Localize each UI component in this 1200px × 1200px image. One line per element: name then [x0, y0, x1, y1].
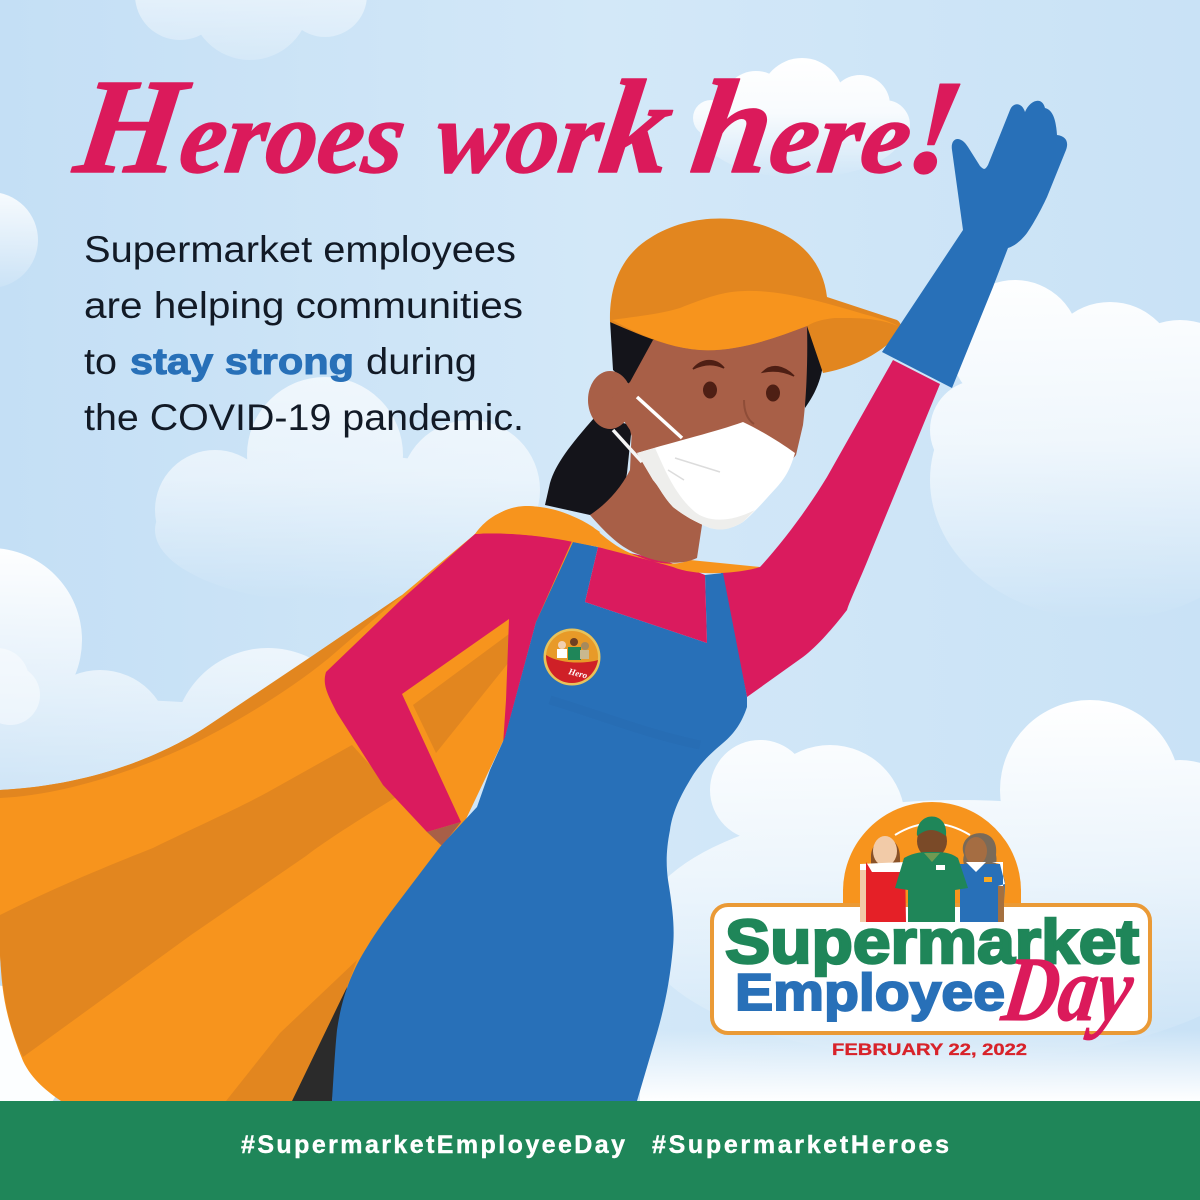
collar: [585, 547, 707, 643]
face mask: [613, 397, 795, 530]
body text: during: [366, 341, 477, 382]
logo: Supermarket Employee Day: Day: [996, 938, 1140, 1040]
logo date: FEBRUARY 22, 2022: [832, 1040, 1027, 1059]
hashtags: [241, 1131, 949, 1159]
body text: stay strong: [130, 341, 354, 382]
cape: [0, 506, 600, 1101]
body text: Supermarket employees: [84, 229, 516, 270]
hero figure: [0, 101, 1067, 1101]
cape collar: [475, 506, 760, 573]
body text: to: [84, 341, 117, 382]
glove: [882, 101, 1067, 388]
body text: are helping communities: [84, 285, 523, 326]
hero button: [544, 628, 600, 686]
neck: [590, 425, 702, 563]
title: !: [899, 54, 972, 202]
title: here: [684, 54, 923, 202]
logo workers: [860, 816, 1005, 922]
body text: [84, 229, 524, 438]
arms and torso: [325, 360, 940, 832]
logo box: [712, 905, 1150, 1033]
title: work: [428, 54, 682, 202]
eyes and brows: [693, 361, 794, 424]
title: Heroes: [67, 51, 417, 202]
hair: [610, 320, 823, 408]
ponytail: [545, 417, 632, 515]
logo: Supermarket Employee Day: Employee: [735, 964, 1005, 1022]
apron: [332, 542, 747, 1101]
apron fold shading: [550, 700, 700, 745]
body text: the COVID-19 pandemic.: [84, 397, 524, 438]
face: [610, 325, 807, 520]
footer band: [0, 1101, 1200, 1200]
hand on hip: [427, 822, 461, 846]
title: [67, 51, 972, 202]
logo: Supermarket Employee Day: [712, 802, 1150, 1059]
ear: [588, 371, 632, 429]
logo sun arch: [843, 802, 1021, 905]
logo wordmark: Supermarket: [725, 908, 1139, 977]
hashtags: #SupermarketHeroes: [652, 1131, 949, 1159]
hero button: Hero: [567, 666, 589, 681]
hashtags: #SupermarketEmployeeDay: [241, 1131, 625, 1159]
cap: [610, 218, 901, 373]
